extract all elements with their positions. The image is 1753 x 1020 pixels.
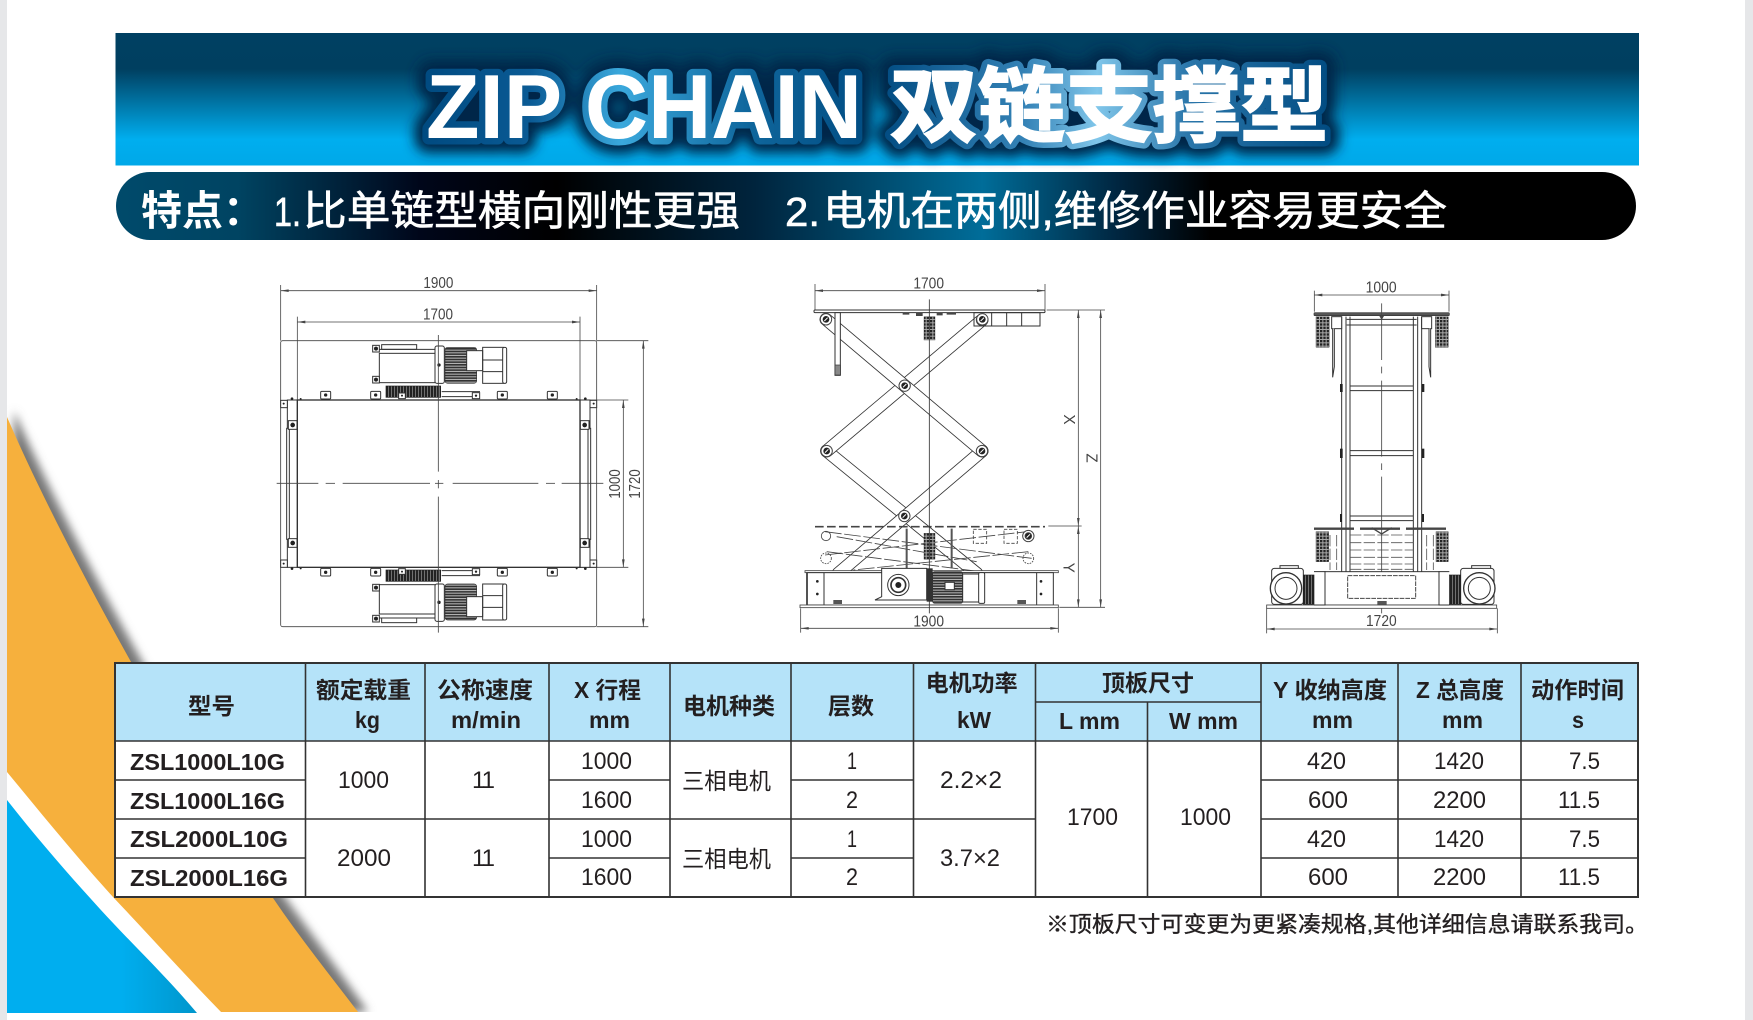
dimension 1720: 1720 [627, 469, 644, 499]
motor unit: bottom [373, 569, 507, 623]
drawing: side view [800, 276, 1105, 633]
table header: 动作时间 [1531, 677, 1624, 703]
center lines [277, 335, 603, 633]
table header: s [1572, 707, 1584, 733]
motor type, layers and power values: 三相电机 [682, 846, 771, 872]
height and time values: 11.5 [1558, 864, 1600, 891]
table header: kg [355, 707, 380, 733]
motor type, layers and power values: 1 [847, 826, 857, 853]
load, speed and stroke values: 1000 [338, 767, 389, 794]
center line [1380, 303, 1383, 613]
dimension 1700: 1700 [423, 306, 453, 323]
height and time values: 420 [1307, 826, 1346, 853]
title text [426, 57, 1328, 158]
table header: mm [1312, 707, 1353, 733]
model names: ZSL2000L16G [130, 865, 288, 891]
base [1267, 572, 1497, 608]
motor type, layers and power values: 1 [847, 748, 857, 775]
table header: 电机种类 [683, 693, 775, 719]
table header [188, 670, 1624, 734]
title banner [116, 33, 1639, 166]
features bar [116, 172, 1636, 240]
table header: 型号 [188, 693, 235, 719]
title text outline: ZIP CHAIN [426, 57, 862, 158]
table header: Z 总高度 [1416, 677, 1504, 703]
height and time values: 2200 [1433, 787, 1486, 814]
height and time values: 420 [1307, 748, 1346, 775]
motor: right [1439, 566, 1495, 605]
height and time values: 2200 [1433, 864, 1486, 891]
load, speed and stroke values: 1600 [581, 787, 632, 814]
load, speed and stroke values [337, 748, 632, 891]
dimension 1720: 1720 [1366, 613, 1397, 630]
top plate [814, 310, 1045, 375]
feature 2: 2. [785, 189, 820, 235]
specification table [115, 663, 1638, 897]
table header: 公称速度 [437, 677, 533, 703]
feature heading: 特点： [141, 188, 264, 234]
table header: mm [589, 707, 630, 733]
lowered position, dashed [815, 527, 1045, 572]
dimension 1900: 1900 [423, 275, 453, 292]
title text: 双链支撑型 [890, 62, 1328, 153]
lift columns [1340, 317, 1424, 572]
top plate size values [1067, 804, 1231, 831]
title text outline: 双链支撑型 [890, 62, 1328, 153]
table header: mm [1442, 707, 1483, 733]
dimensions X Y Z: Z [1083, 453, 1100, 463]
load, speed and stroke values: 1600 [581, 864, 632, 891]
load, speed and stroke values: 11 [472, 767, 495, 794]
motor: left [1270, 566, 1325, 605]
lowered plate and chains [1314, 528, 1449, 570]
top plate size values: 1700 [1067, 804, 1118, 831]
motor type, layers and power values: 2 [846, 787, 858, 814]
title text outline [426, 57, 1328, 158]
decorative background swoosh [7, 411, 371, 1013]
table header: W mm [1169, 708, 1238, 734]
height and time values: 7.5 [1569, 826, 1600, 853]
load, speed and stroke values: 1000 [581, 826, 632, 853]
feature 2: 电机在两侧,维修作业容易更安全 [823, 188, 1447, 234]
base with motor [800, 568, 1058, 608]
table header: kW [957, 707, 991, 733]
height and time values: 11.5 [1558, 787, 1600, 814]
motor type, layers and power values: 2.2×2 [940, 767, 1002, 794]
dimensions X Y Z [1047, 310, 1105, 607]
height and time values: 1420 [1434, 748, 1484, 775]
table header: Y 收纳高度 [1273, 677, 1387, 703]
top plate and chains [1314, 313, 1449, 377]
title text glow [426, 57, 1328, 158]
center line [928, 299, 931, 613]
table header: X 行程 [574, 677, 641, 703]
dimension 1900: 1900 [913, 614, 944, 631]
feature 1: 比单链型横向刚性更强 [303, 188, 740, 234]
motor type, layers and power values: 3.7×2 [940, 845, 1000, 872]
drawing: end view [1267, 279, 1497, 633]
drawing: top view [277, 275, 648, 633]
height and time values [1307, 748, 1600, 891]
scissor pivots [820, 314, 988, 522]
title text glow: ZIP CHAIN [426, 57, 862, 158]
dimension 1000: 1000 [1366, 279, 1397, 296]
footnote: ※顶板尺寸可变更为更紧凑规格,其他详细信息请联系我司。 [1046, 912, 1648, 937]
table header: 额定载重 [316, 677, 411, 703]
motor type, layers and power values: 2 [846, 864, 858, 891]
model names: ZSL1000L16G [130, 788, 285, 814]
feature 1: 1. [274, 189, 301, 235]
table header: 电机功率 [926, 670, 1018, 696]
table header: L mm [1059, 708, 1120, 734]
load, speed and stroke values: 1000 [581, 748, 632, 775]
dimensions X Y Z: Y [1059, 563, 1076, 573]
model names [130, 749, 288, 891]
dimension 1700: 1700 [913, 276, 944, 293]
motor type, layers and power values: 三相电机 [682, 768, 771, 794]
height and time values: 600 [1308, 787, 1348, 814]
dimension 1000 [1314, 279, 1449, 312]
height and time values: 1420 [1434, 826, 1484, 853]
load, speed and stroke values: 2000 [337, 845, 391, 872]
table header: m/min [451, 707, 521, 733]
motor type, layers and power values [682, 748, 1002, 891]
scissor arms [826, 319, 982, 573]
model names: ZSL2000L10G [130, 826, 288, 852]
motor unit: top [373, 345, 507, 399]
title text: ZIP CHAIN [426, 57, 862, 158]
table grid [115, 663, 1638, 897]
table header: 顶板尺寸 [1102, 670, 1194, 696]
title text glow: 双链支撑型 [890, 62, 1328, 153]
load, speed and stroke values: 11 [472, 845, 495, 872]
dimension 1000: 1000 [607, 469, 624, 499]
table header: 层数 [828, 693, 874, 719]
height and time values: 7.5 [1569, 748, 1600, 775]
top plate size values: 1000 [1180, 804, 1231, 831]
model names: ZSL1000L10G [130, 749, 285, 775]
height and time values: 600 [1308, 864, 1348, 891]
platform [281, 391, 597, 576]
dimensions X Y Z: X [1060, 414, 1077, 425]
